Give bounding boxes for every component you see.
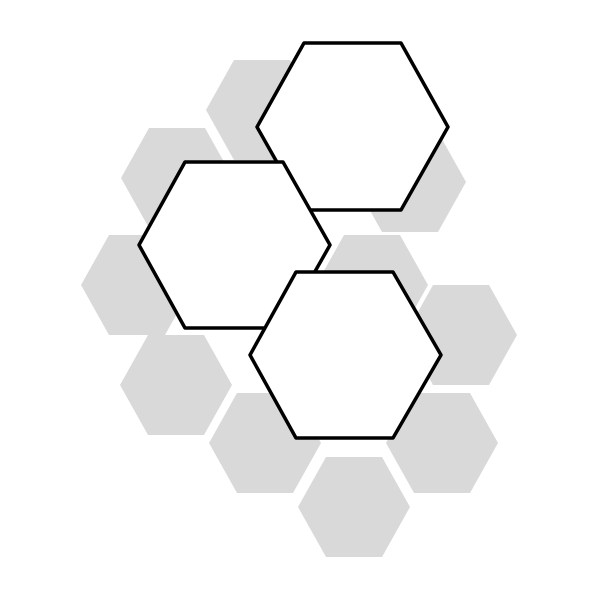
outlined hexagon: bottom: [250, 272, 441, 438]
outlined hexagon: top: [257, 43, 448, 210]
outlined hexagon: middle left: [139, 162, 330, 328]
background gray hexagons: [81, 60, 517, 557]
